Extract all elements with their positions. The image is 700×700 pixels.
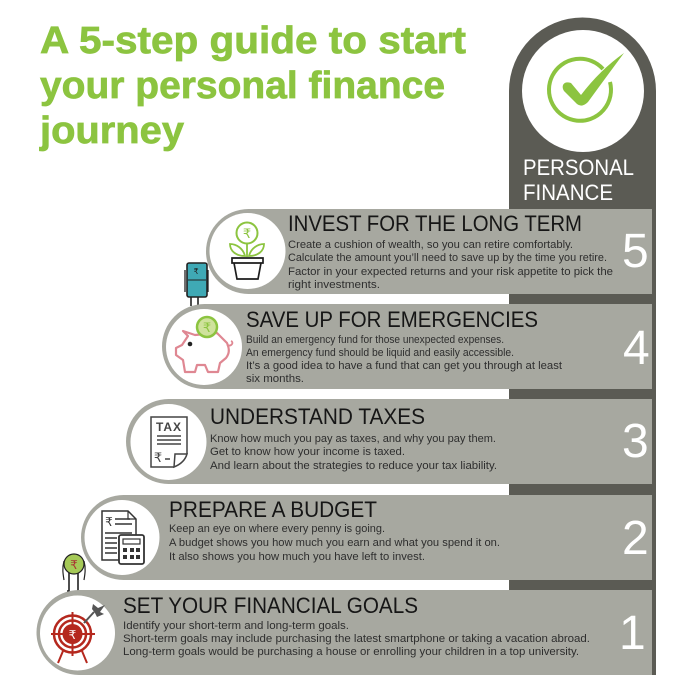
tower label: FINANCE [523, 180, 613, 205]
icon: check mark [549, 53, 624, 121]
text block [123, 620, 590, 658]
text block: It also shows you how much you have left to invest. [169, 551, 425, 563]
icon: piggy bank [176, 317, 232, 372]
heading: SAVE UP FOR EMERGENCIES [246, 307, 538, 332]
tower label: PERSONAL [523, 155, 634, 180]
text block: right investments. [288, 279, 380, 291]
text block: Identify your short-term and long-term goals. [123, 620, 349, 632]
number 1: 1 [619, 607, 646, 660]
title: your personal finance [40, 65, 445, 107]
panel: step 2 budget [81, 495, 652, 580]
number 5: 5 [622, 225, 649, 278]
text block: An emergency fund should be liquid and easily accessible. [246, 347, 514, 359]
icon: phone character: ₹ [193, 267, 199, 276]
heading: PREPARE A BUDGET [169, 497, 377, 522]
icon: tax document: TAX [156, 420, 182, 434]
text block: And learn about the strategies to reduce your tax liability. [210, 460, 497, 472]
icon: piggy bank: ₹ [203, 321, 211, 336]
number 2: 2 [622, 512, 649, 565]
tower label [523, 155, 634, 205]
icon: plant pot: ₹ [243, 227, 251, 242]
panel: personal finance tower [509, 17, 656, 675]
text block: Create a cushion of wealth, so you can retire comfortably. [288, 239, 573, 251]
text block: Short-term goals may include purchasing the latest smartphone or taking a vacation abroad. [123, 633, 590, 645]
title [39, 20, 466, 152]
text block [169, 523, 500, 563]
icon: bill and calculator [102, 511, 144, 564]
icon: target with arrow: ₹ [69, 628, 77, 642]
text block: Get to know how your income is taxed. [210, 446, 405, 458]
icon: target with arrow [51, 604, 105, 663]
text block: It’s a good idea to have a fund that can get you through at least [246, 360, 563, 372]
icon: phone character [185, 263, 208, 306]
text block: Know how much you pay as taxes, and why you pay them. [210, 433, 496, 445]
icon: coin character [63, 554, 85, 591]
icon: tax document [151, 417, 187, 467]
text block [288, 239, 613, 291]
heading: UNDERSTAND TAXES [210, 404, 425, 429]
text block: A budget shows you how much you earn and what you spend it on. [169, 537, 500, 549]
number 4: 4 [623, 322, 650, 375]
heading: INVEST FOR THE LONG TERM [288, 211, 582, 236]
title: A 5-step guide to start [40, 20, 466, 62]
icon: tax document: ₹ [154, 451, 162, 466]
icon: coin character: ₹ [70, 558, 78, 572]
text block: Keep an eye on where every penny is going. [169, 523, 385, 535]
panel: step 3 taxes [126, 399, 652, 484]
panel: step 1 goals [36, 590, 652, 675]
text block [246, 334, 563, 385]
icon: plant pot [230, 222, 264, 279]
text block: Calculate the amount you’ll need to save up by the time you retire. [288, 252, 607, 264]
title: journey [39, 110, 184, 152]
text block: six months. [246, 373, 304, 385]
icon: bill and calculator: ₹ [105, 515, 113, 529]
panel: step 4 emergencies [162, 304, 652, 389]
text block: Long-term goals would be purchasing a house or enrolling your children in a top university. [123, 646, 579, 658]
heading: SET YOUR FINANCIAL GOALS [123, 593, 418, 618]
number 3: 3 [622, 415, 649, 468]
text block [210, 433, 497, 472]
text block: Build an emergency fund for those unexpected expenses. [246, 334, 504, 346]
text block: Factor in your expected returns and your risk appetite to pick the [288, 266, 613, 278]
panel: step 5 invest [206, 209, 652, 294]
